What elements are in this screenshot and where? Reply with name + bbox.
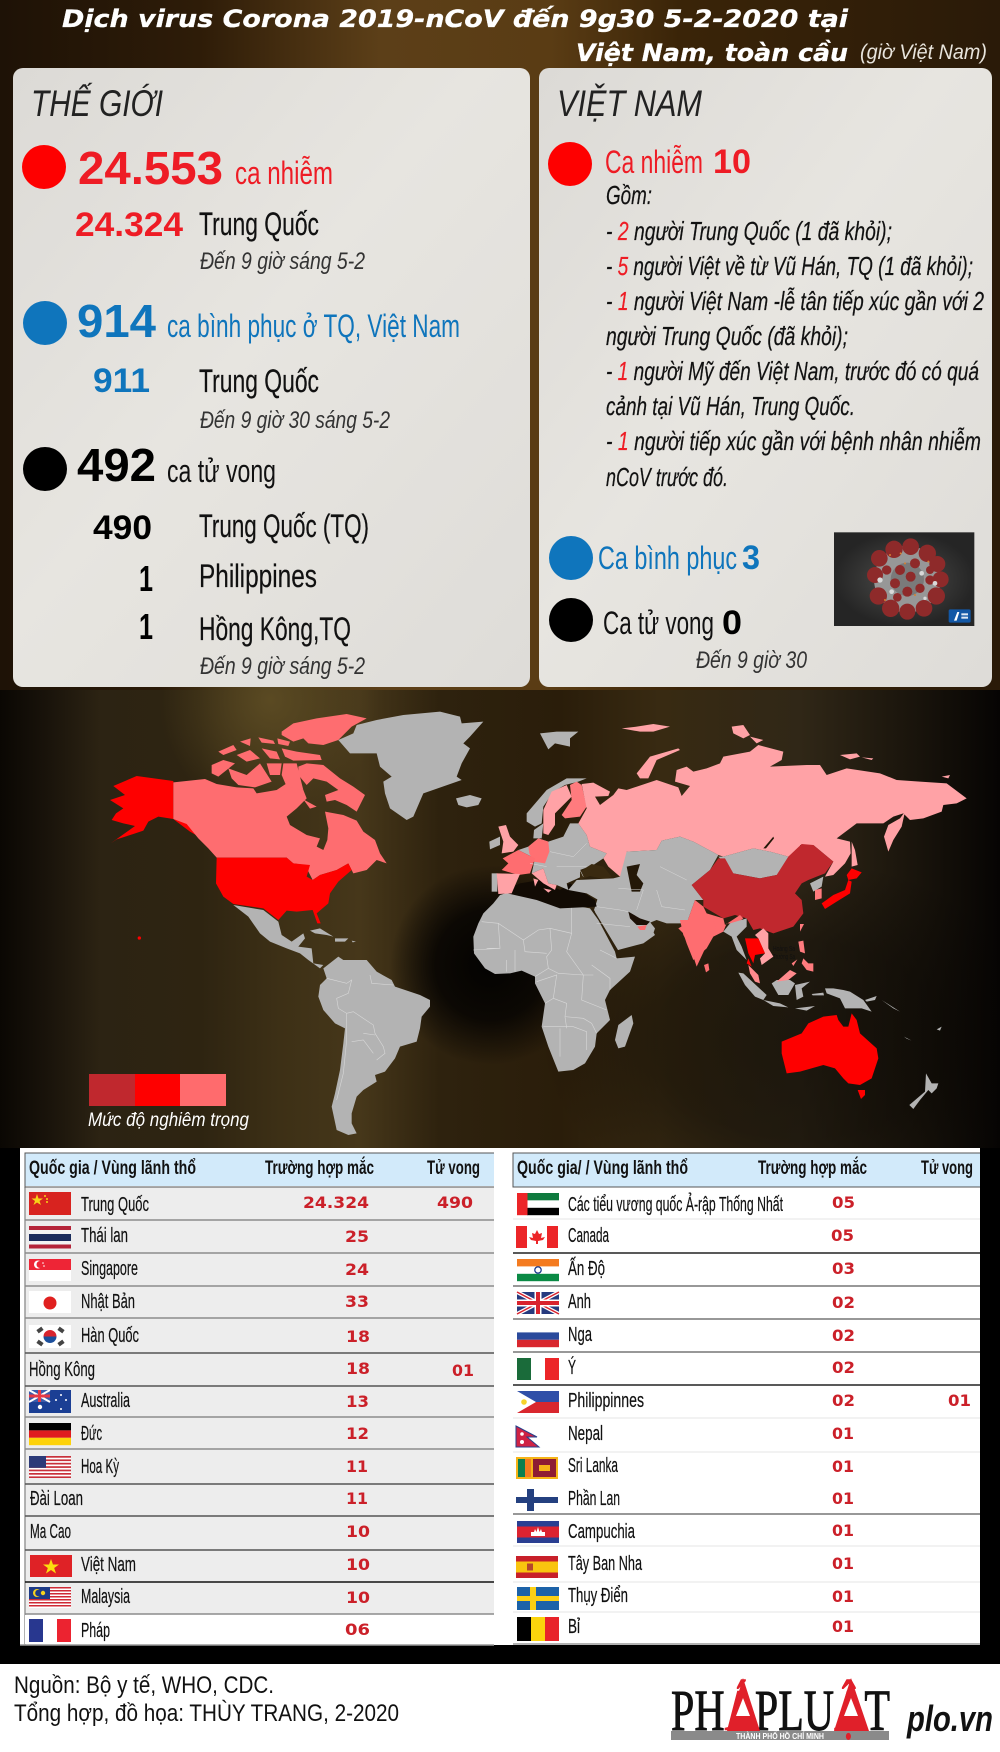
China [692, 844, 833, 933]
Vietnam case breakdown: - 2 người Trung Quốc (1 đã khỏi); [606, 216, 892, 246]
header row left [25, 1153, 494, 1187]
row: Thái lan: 25 [345, 1227, 369, 1246]
row: Thái lan: Thái lan [81, 1224, 128, 1247]
Vietnam case breakdown [606, 180, 984, 492]
Arabia and Middle East south edge [594, 897, 655, 950]
row: Nepal: 01 [832, 1424, 854, 1443]
world infected total [78, 142, 333, 194]
Africa [473, 892, 635, 1072]
row: Phần Lan: Phần Lan [568, 1487, 620, 1510]
row: Trung Quốc [29, 1192, 473, 1216]
source credits [14, 1672, 399, 1727]
row: Bỉ: 01 [832, 1617, 854, 1636]
row: Việt Nam [30, 1553, 370, 1577]
heading: VIỆT NAM: VIỆT NAM [557, 83, 702, 124]
row: Nhật Bản: Nhật Bản [81, 1290, 135, 1313]
world recovered total [77, 295, 460, 347]
row: Ý: 02 [832, 1358, 855, 1377]
row: Hàn Quốc [29, 1324, 370, 1348]
map: Southeast Asia and Oceania [680, 920, 942, 1109]
deaths by country: 490 [93, 509, 152, 547]
row: Nepal [516, 1422, 854, 1447]
row: Hồng Kông [29, 1358, 474, 1381]
deaths by country: 1 [139, 558, 153, 599]
header row right: Trường hợp mắc [758, 1157, 867, 1179]
label: Trường Sa: Trường Sa [773, 954, 795, 961]
row: Pháp: 06 [345, 1620, 370, 1639]
row: Ấn Độ: Ấn Độ [568, 1257, 605, 1280]
table: right [513, 1153, 980, 1644]
source credits: Nguồn: Bộ y tế, WHO, CDC. [14, 1672, 274, 1699]
row: Hoa Kỳ [29, 1455, 368, 1478]
East Malaysia [777, 970, 797, 982]
icon: red circle [22, 145, 66, 189]
UAE [637, 925, 647, 930]
Vietnam case breakdown: cảnh tại Vũ Hán, Trung Quốc. [606, 391, 855, 421]
Persian Gulf [628, 912, 650, 925]
icon: blue circle [549, 536, 593, 580]
table: left [20, 1153, 494, 1645]
Russia [578, 745, 967, 877]
row: Canada: Canada [568, 1224, 609, 1247]
row: Đức: 12 [346, 1424, 369, 1443]
row: Tây Ban Nha: 01 [832, 1554, 854, 1573]
row: UAE: Các tiểu vương quốc Ả-rập Thống Nhất [568, 1193, 783, 1216]
deaths by country: Trung Quốc (TQ) [199, 508, 369, 544]
South America [318, 957, 430, 1135]
Vietnam deaths: 0 [722, 604, 742, 642]
France [502, 850, 535, 875]
row: Singapore [29, 1257, 369, 1281]
row: Hàn Quốc: Hàn Quốc [81, 1324, 139, 1347]
Ireland and UK [489, 837, 500, 849]
row: Canada: 05 [831, 1226, 854, 1245]
row: Việt Nam: Việt Nam [81, 1553, 136, 1576]
Mongolia [718, 848, 798, 878]
row: Anh [517, 1290, 855, 1314]
label: Hoàng Sa: Hoàng Sa [773, 946, 795, 953]
China infected: Trung Quốc [199, 206, 319, 242]
map legend: Mức độ nghiêm trọng [88, 1110, 249, 1131]
Alaska [110, 776, 200, 940]
row: Ý [517, 1356, 855, 1380]
China infected: 24.324 [75, 206, 183, 244]
Vietnam recovered: 3 [742, 539, 760, 577]
icon: blue circle [23, 301, 67, 345]
deaths by country: Hồng Kông,TQ [199, 611, 351, 647]
China recovered: Trung Quốc [199, 363, 319, 399]
Japan [822, 868, 862, 909]
header row right [513, 1153, 980, 1187]
row: UAE [517, 1193, 855, 1216]
map: North America [110, 712, 483, 940]
row: Ma Cao [30, 1520, 370, 1543]
icon: red circle [548, 142, 592, 186]
Thailand [745, 938, 765, 967]
Australia [782, 1013, 878, 1099]
Iceland [456, 795, 482, 807]
map: Eurasia [489, 724, 967, 960]
logo: Pháp Luật: PHÁPLUẬT [671, 1678, 890, 1743]
row: Đài Loan [30, 1487, 368, 1510]
row: Trung Quốc: 24.324 [303, 1193, 369, 1212]
Vietnam infected: Ca nhiễm [605, 144, 703, 180]
Finland [562, 782, 587, 818]
row: Australia [29, 1389, 369, 1413]
row: Đài Loan: Đài Loan [30, 1487, 83, 1510]
India tip fill [680, 920, 717, 967]
row: Hàn Quốc: 18 [346, 1327, 370, 1346]
New Guinea [825, 988, 900, 1012]
row: Anh: 02 [832, 1293, 855, 1312]
Middle East and Central Asia [568, 837, 718, 950]
Philippines [792, 941, 813, 972]
row: Campuchia [517, 1520, 854, 1543]
Lake Baikal [763, 837, 774, 848]
world deaths total: 492 [77, 439, 156, 491]
row: Đài Loan: 11 [346, 1489, 368, 1508]
Svalbard [540, 732, 578, 749]
Taiwan and Hainan [800, 924, 804, 932]
Mediterranean [500, 880, 597, 908]
row: Hồng Kông: 01 [452, 1361, 474, 1380]
timestamp: Đến 9 giờ 30 [696, 647, 808, 674]
row: Ma Cao: 10 [346, 1522, 370, 1541]
Caspian Sea [627, 864, 643, 892]
Vietnam case breakdown: nCoV trước đó. [606, 462, 728, 492]
China infected: Đến 9 giờ sáng 5-2 [200, 248, 365, 275]
Germany [528, 838, 549, 863]
row: Trung Quốc: 490 [437, 1193, 473, 1212]
header row right: Quốc gia/ / Vùng lãnh thổ [517, 1158, 688, 1179]
row: Ấn Độ: 03 [832, 1259, 855, 1278]
China recovered [93, 362, 390, 434]
row: Malaysia: Malaysia [81, 1585, 130, 1608]
row: Australia: Australia [81, 1389, 130, 1412]
row: Hoa Kỳ: Hoa Kỳ [81, 1455, 119, 1478]
footer [0, 1664, 1000, 1752]
title: Dịch virus Corona 2019-nCoV đến 9g30 5-2-2020 tại [62, 4, 849, 33]
title [62, 4, 987, 67]
Sri Lanka [704, 963, 709, 972]
deaths by country: Philippines [199, 558, 317, 594]
Malaysia [748, 965, 760, 983]
row: Phần Lan [516, 1487, 854, 1511]
row: Ý: Ý [568, 1356, 576, 1379]
contiguous USA [216, 858, 352, 923]
India [678, 900, 743, 960]
row: Phần Lan: 01 [832, 1489, 854, 1508]
row: Nepal: Nepal [568, 1422, 603, 1445]
logo: Pháp Luật: THÀNH PHỐ HỒ CHÍ MINH [736, 1731, 824, 1741]
Canada [173, 714, 387, 880]
row: Sri Lanka [516, 1454, 854, 1479]
row: Australia: 13 [346, 1392, 369, 1411]
row: Singapore: Singapore [81, 1257, 138, 1280]
Vietnam infected: 10 [713, 143, 751, 181]
row: Nga [517, 1323, 855, 1347]
row: Canada [516, 1224, 854, 1248]
row: Hồng Kông: 18 [346, 1359, 370, 1378]
deaths by country: 1 [139, 606, 153, 647]
row: Malaysia: 10 [346, 1588, 370, 1607]
row: Trung Quốc: Trung Quốc [81, 1193, 149, 1216]
New Zealand [904, 1027, 942, 1109]
China recovered: 911 [93, 362, 150, 400]
row: Ma Cao: Ma Cao [30, 1520, 71, 1543]
Indonesia [738, 973, 824, 1011]
source credits: Tổng hợp, đồ họa: THÙY TRANG, 2-2020 [14, 1700, 399, 1727]
Black Sea [580, 864, 612, 880]
Europe [518, 823, 607, 890]
row: Sri Lanka: Sri Lanka [568, 1454, 618, 1477]
map: Latin America and Africa [233, 892, 655, 1135]
row: Đức [29, 1422, 369, 1445]
row: Thụy Điển: 01 [832, 1587, 854, 1606]
Mexico and Central America [233, 905, 323, 968]
panel: Vietnam [539, 68, 992, 687]
row: Philippinnes: Philippinnes [568, 1389, 644, 1412]
row: Ấn Độ [517, 1257, 855, 1281]
row: Anh: Anh [568, 1290, 591, 1313]
header row right: Tử vong [921, 1158, 973, 1179]
China recovered: Đến 9 giờ 30 sáng 5-2 [200, 407, 390, 434]
Madagascar [615, 1015, 633, 1048]
row: Thái lan [29, 1224, 369, 1248]
row: Pháp: Pháp [81, 1619, 110, 1642]
world recovered total: 914 [77, 295, 156, 347]
row: Nhật Bản [29, 1290, 369, 1313]
Vietnam case breakdown: người Trung Quốc (đã khỏi); [606, 321, 848, 351]
row: Tây Ban Nha [516, 1552, 854, 1578]
panel: world [13, 68, 530, 687]
row: Thụy Điển: Thụy Điển [568, 1584, 628, 1607]
deaths by country [93, 508, 369, 680]
world map [110, 712, 967, 1135]
row: Singapore: 24 [345, 1260, 369, 1279]
map legend [88, 1074, 249, 1131]
Korea [810, 877, 823, 892]
row: Pháp [25, 1615, 494, 1644]
Caribbean [310, 928, 356, 942]
Vietnam recovered: Ca bình phục [598, 540, 737, 576]
row: Sri Lanka: 01 [832, 1457, 854, 1476]
world deaths total [77, 439, 276, 491]
row: Thụy Điển [517, 1584, 854, 1610]
row: Nhật Bản: 33 [345, 1292, 369, 1311]
Greenland [338, 712, 483, 820]
Norway and Denmark [527, 778, 587, 838]
icon: black circle [549, 598, 593, 642]
row: Nga: 02 [832, 1326, 855, 1345]
world recovered total: ca bình phục ở TQ, Việt Nam [167, 308, 460, 344]
row: Hồng Kông: Hồng Kông [29, 1358, 95, 1381]
table base [20, 1148, 980, 1645]
icon: coronavirus image [834, 532, 974, 626]
world deaths total: ca tử vong [167, 453, 276, 489]
header row left: Quốc gia / Vùng lãnh thổ [29, 1158, 196, 1179]
header row left: Tử vong [427, 1158, 480, 1179]
row: Philippinnes: 01 [948, 1391, 971, 1410]
title: (giờ Việt Nam) [860, 41, 987, 64]
world infected total: ca nhiễm [235, 155, 333, 191]
row: Đức: Đức [81, 1422, 102, 1445]
world infected total: 24.553 [78, 142, 223, 194]
row: Campuchia: 01 [832, 1521, 854, 1540]
row: Tây Ban Nha: Tây Ban Nha [568, 1552, 642, 1575]
row: Malaysia [29, 1585, 370, 1608]
Vietnam case breakdown: Gồm: [606, 180, 652, 210]
row: Bỉ [517, 1615, 854, 1641]
deaths by country: Đến 9 giờ sáng 5-2 [200, 653, 365, 680]
China infected [75, 206, 365, 275]
row: Bỉ: Bỉ [568, 1615, 580, 1638]
row: Hoa Kỳ: 11 [346, 1457, 368, 1476]
row: Campuchia: Campuchia [568, 1520, 635, 1543]
heading: THẾ GIỚI: THẾ GIỚI [31, 82, 163, 124]
row: Philippinnes: 02 [832, 1391, 855, 1410]
Myanmar [723, 918, 747, 960]
Sweden [543, 785, 572, 835]
row: Philippinnes [517, 1389, 971, 1413]
row: UAE: 05 [832, 1193, 855, 1212]
title: Việt Nam, toàn cầu [576, 38, 848, 67]
row: Việt Nam: 10 [346, 1555, 370, 1574]
Vietnam deaths: Ca tử vong [603, 605, 714, 641]
Spain and Portugal [492, 873, 497, 892]
Italy [532, 868, 557, 893]
icon: black circle [23, 447, 67, 491]
Indochina [755, 928, 773, 965]
header row left: Trường hợp mắc [265, 1157, 374, 1179]
row: Nga: Nga [568, 1323, 592, 1346]
